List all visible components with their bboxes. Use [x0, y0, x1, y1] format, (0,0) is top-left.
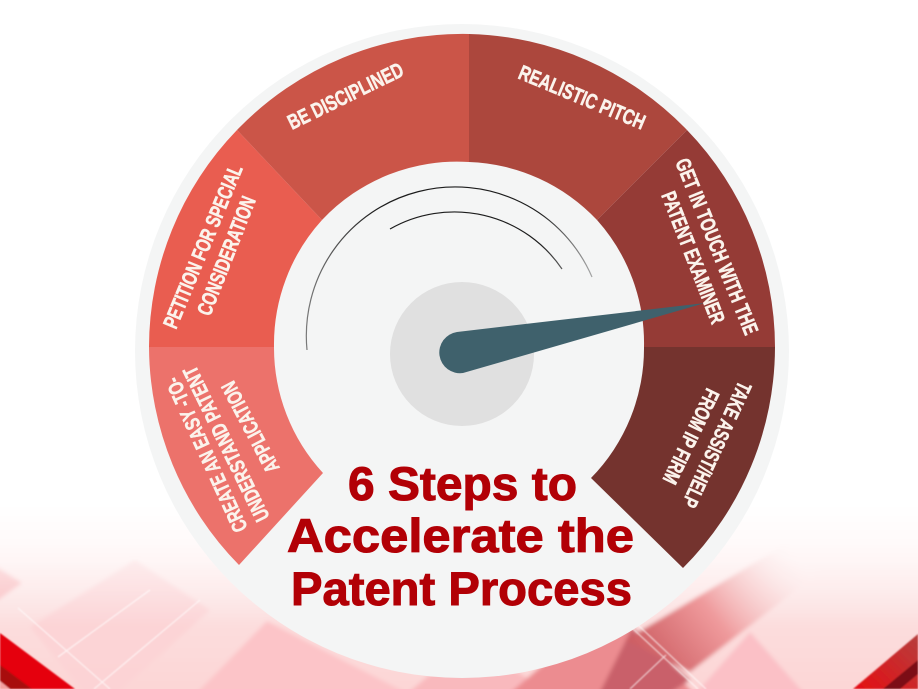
segment: take assist/help from IP firm: [591, 347, 775, 568]
label: realistic pitch: REALISTIC PITCH: [515, 61, 649, 134]
label: petition for special consideration: [159, 161, 261, 332]
gauge hub: [390, 282, 534, 426]
label: create an easy to understand patent application: APPLICATION: [217, 377, 284, 476]
segment: create an easy to understand application: [149, 347, 323, 565]
label: petition for special consideration: CONSIDERATION: [193, 193, 261, 319]
background: red corner bands: [0, 633, 918, 689]
title: Accelerate the: [287, 509, 634, 562]
label: petition for special consideration: PETITION FOR SPECIAL: [159, 161, 248, 332]
label: create an easy to understand patent application: UNDERSTAND PATENT: [179, 362, 274, 525]
label: be disciplined: BE DISCIPLINED: [284, 59, 407, 134]
segment: realistic pitch: [469, 34, 687, 220]
dial backing circle: [135, 24, 789, 678]
segment: be disciplined: [237, 34, 469, 220]
segment: petition for special consideration: [149, 130, 322, 347]
label: take assist/help from IP firm: TAKE ASSIST/HELP: [677, 378, 755, 511]
label: get in touch with the patent examiner: [656, 155, 762, 338]
background: pink geometric shapes: [0, 440, 918, 689]
label: create an easy to understand patent application: [162, 362, 284, 535]
gauge arcs: [306, 187, 592, 350]
segment: get in touch with the patent examiner: [597, 130, 775, 347]
label: create an easy to understand patent application: CREATE AN EASY -TO-: [162, 373, 253, 535]
label: take assist/help from IP firm: FROM IP FIRM: [658, 385, 723, 488]
title: Patent Process: [291, 562, 632, 615]
label: get in touch with the patent examiner: GET IN TOUCH WITH THE: [670, 155, 762, 338]
gauge needle: [439, 303, 705, 373]
title: 6 Steps to: [348, 457, 577, 510]
title: [287, 457, 634, 615]
panel: dial segments: [149, 34, 775, 568]
background: white grid lines: [18, 590, 706, 689]
label: take assist/help from IP firm: [658, 378, 755, 511]
label: get in touch with the patent examiner: PATENT EXAMINER: [656, 188, 729, 327]
